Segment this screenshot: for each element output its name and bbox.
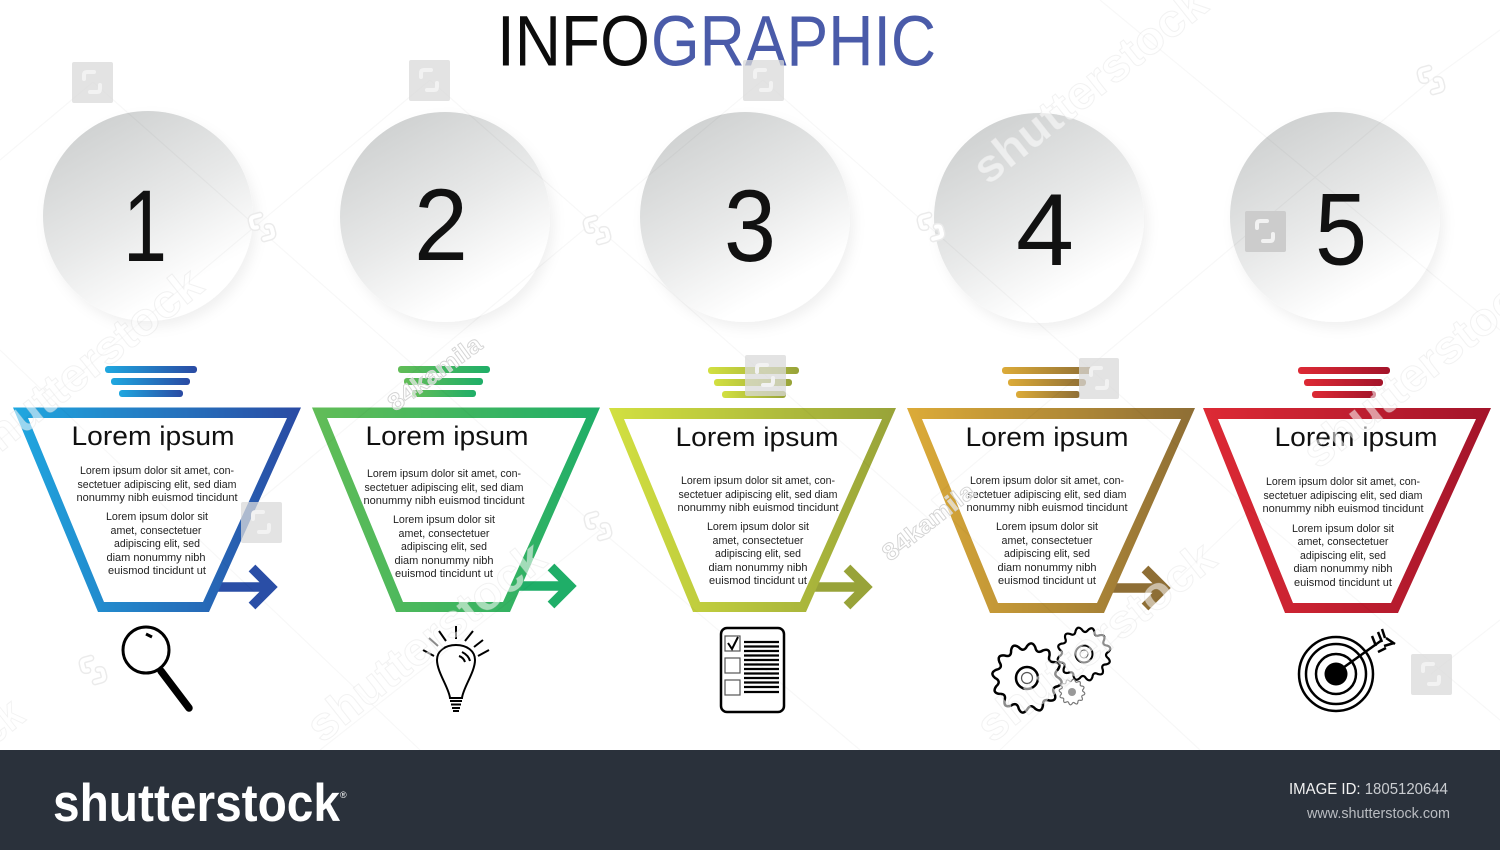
body text: nonummy nibh euismod tincidunt (364, 495, 524, 507)
body text (364, 468, 524, 580)
body text (678, 475, 838, 587)
icon: magnifying glass (123, 627, 189, 708)
body text (76, 465, 238, 577)
trapezoid frame (312, 408, 600, 612)
number circle 3 (640, 112, 850, 322)
body text: nonummy nibh euismod tincidunt (76, 492, 238, 504)
watermark overlay: 84kamila (383, 330, 488, 417)
stacked bars (105, 366, 197, 397)
stacked bars (1298, 367, 1390, 398)
title: INFO (497, 2, 650, 82)
body text: Lorem ipsum dolor sit amet, con- (1266, 476, 1420, 488)
body text: euismod tincidunt ut (998, 575, 1096, 587)
shutterstock logo: shutterstock (53, 774, 340, 833)
trapezoid frame (13, 408, 301, 612)
body text (966, 475, 1128, 587)
number 5: 5 (1315, 172, 1367, 286)
number 4: 4 (1016, 173, 1074, 287)
body text: adipiscing elit, sed (1300, 550, 1386, 562)
trapezoid frame (609, 408, 896, 612)
watermark overlay: shutterstock (966, 530, 1226, 752)
title: GRAPHIC (651, 2, 936, 82)
body text: sectetuer adipiscing elit, sed diam (968, 489, 1126, 501)
body text: amet, consectetuer (712, 535, 804, 547)
trapezoid frame (1203, 408, 1491, 613)
arrow (216, 568, 271, 606)
stacked bars (708, 367, 799, 398)
body text: euismod tincidunt ut (108, 565, 206, 577)
icon: light bulb (423, 626, 489, 712)
body text: nonummy nibh euismod tincidunt (1262, 503, 1424, 515)
body text: Lorem ipsum dolor sit amet, con- (367, 468, 521, 480)
body text: sectetuer adipiscing elit, sed diam (364, 482, 524, 494)
body text: euismod tincidunt ut (709, 575, 807, 587)
panel: step 1 (13, 111, 301, 708)
body text: adipiscing elit, sed (715, 548, 801, 560)
body text: adipiscing elit, sed (401, 541, 487, 553)
number 1: 1 (123, 169, 167, 283)
body text (1262, 476, 1424, 589)
body text: adipiscing elit, sed (114, 538, 200, 550)
body text: sectetuer adipiscing elit, sed diam (78, 479, 236, 491)
heading: Lorem ipsum (966, 422, 1128, 452)
body text: nonummy nibh euismod tincidunt (678, 502, 838, 514)
body text: amet, consectetuer (1002, 535, 1093, 547)
website: www.shutterstock.com (1306, 805, 1450, 822)
number 3: 3 (724, 169, 776, 283)
number 2: 2 (414, 168, 468, 282)
body text: sectetuer adipiscing elit, sed diam (1264, 490, 1422, 502)
body text: amet, consectetuer (398, 528, 490, 540)
watermark overlay: shutterstock (296, 530, 556, 752)
footer bar (0, 750, 1500, 850)
body text: Lorem ipsum dolor sit amet, con- (681, 475, 835, 487)
arrow (810, 568, 866, 606)
number circle 5 (1230, 112, 1440, 322)
body text: Lorem ipsum dolor sit (707, 521, 809, 533)
arrow (514, 567, 570, 605)
heading: Lorem ipsum (366, 421, 528, 451)
body text: Lorem ipsum dolor sit (393, 514, 495, 526)
number circle 4 (934, 113, 1144, 323)
body text: adipiscing elit, sed (1004, 548, 1090, 560)
panel: step 5 (1203, 112, 1491, 711)
heading: Lorem ipsum (1274, 422, 1438, 452)
body text: sectetuer adipiscing elit, sed diam (678, 489, 838, 501)
panel: step 2 (312, 112, 600, 712)
body text: euismod tincidunt ut (395, 568, 493, 580)
body text: amet, consectetuer (110, 525, 202, 537)
body text: nonummy nibh euismod tincidunt (966, 502, 1128, 514)
body text: amet, consectetuer (1298, 536, 1389, 548)
body text: diam nonummy nibh (998, 562, 1096, 574)
stacked bars (398, 366, 490, 397)
body text: euismod tincidunt ut (1294, 577, 1392, 589)
number circle 2 (340, 112, 550, 322)
heading: Lorem ipsum (72, 421, 234, 451)
arrow (1108, 569, 1164, 607)
trapezoid frame (907, 408, 1195, 613)
icon: target with arrow (1299, 629, 1395, 711)
panel: step 4 (907, 113, 1195, 713)
body text: Lorem ipsum dolor sit (996, 521, 1098, 533)
image id: IMAGE ID: 1805120644 (1289, 781, 1448, 798)
panel: step 3 (609, 112, 896, 712)
watermark overlay: 84kamila (877, 477, 981, 567)
body text: Lorem ipsum dolor sit (106, 511, 208, 523)
body text: diam nonummy nibh (1294, 563, 1392, 575)
body text: Lorem ipsum dolor sit amet, con- (80, 465, 234, 477)
number circle 1 (43, 111, 253, 321)
icon: gears (992, 623, 1115, 713)
registered mark: ® (340, 790, 347, 800)
body text: Lorem ipsum dolor sit amet, con- (970, 475, 1124, 487)
heading: Lorem ipsum (676, 422, 838, 452)
body text: diam nonummy nibh (106, 552, 206, 564)
stacked bars (1002, 367, 1093, 398)
body text: diam nonummy nibh (708, 562, 808, 574)
body text: Lorem ipsum dolor sit (1292, 523, 1394, 535)
icon: checklist (721, 628, 784, 712)
body text: diam nonummy nibh (394, 555, 494, 567)
